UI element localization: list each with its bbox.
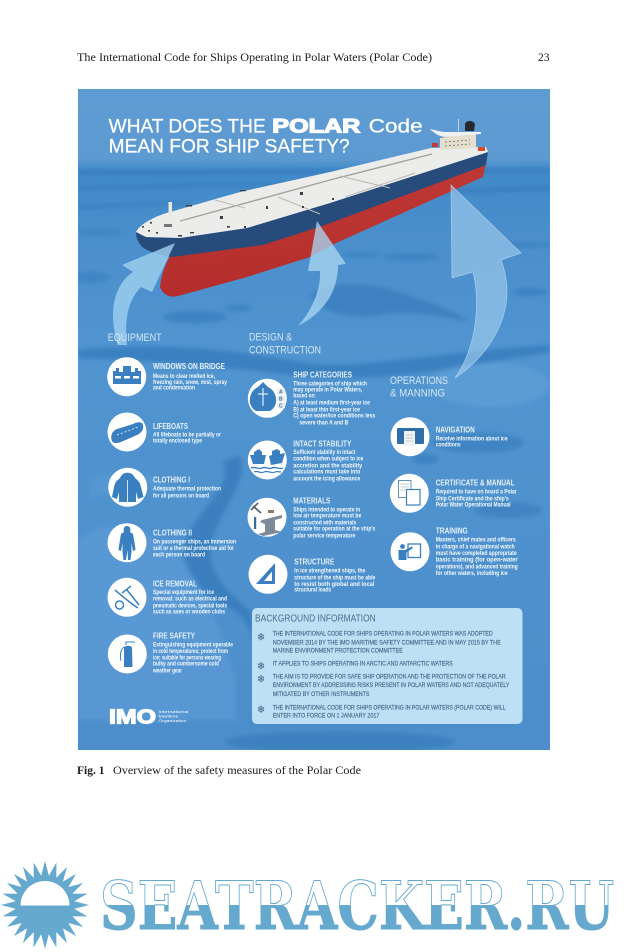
item: intact stability: accretion and the stability bbox=[293, 463, 363, 469]
background information bullets: ENVIRONMENT BY ADDRESSING RISKS PRESENT IN POLAR WATERS AND NOT ADEQUATELY bbox=[273, 683, 509, 689]
item: intact stability: condition when subject to ice bbox=[293, 457, 364, 463]
icon: jacket bbox=[108, 468, 147, 507]
item: training: for other waters, including ice bbox=[436, 571, 508, 577]
icon: documents bbox=[390, 474, 429, 513]
item: certificate and manual: Required to have on board a Polar bbox=[436, 490, 517, 496]
item: materials: constructed with materials bbox=[293, 521, 357, 527]
icon: steel beam and hammer bbox=[248, 498, 286, 537]
item: ship categories: based on: bbox=[293, 394, 316, 400]
icon: set square bbox=[248, 555, 288, 594]
item: ice removal: Special equipment for ice bbox=[153, 590, 215, 596]
item: ship categories: B) at least thin first-year ice bbox=[293, 407, 361, 413]
item: intact stability: INTACT STABILITY bbox=[293, 440, 352, 449]
icon: fire extinguisher bbox=[108, 634, 147, 674]
icon: lifeboat bbox=[108, 412, 146, 452]
item: windows on bridge: and condensation bbox=[153, 386, 195, 392]
item: ice removal: pneumatic devices, special tools bbox=[153, 603, 228, 609]
item: intact stability: Sufficient stability in intact bbox=[293, 450, 355, 456]
title bbox=[108, 118, 422, 153]
background information bullets: NOVEMBER 2014 BY THE IMO MARITIME SAFETY COMMITTEE AND IN MAY 2015 BY THE bbox=[273, 640, 501, 646]
item: clothing I: Adequate thermal protection bbox=[153, 487, 221, 493]
icon: ship with categories: A bbox=[279, 390, 283, 396]
item: materials: polar service temperature bbox=[293, 534, 356, 540]
item: fire safety: ice; suitable for persons wearing bbox=[153, 656, 221, 662]
item: lifeboats: totally enclosed type bbox=[153, 439, 203, 445]
title: WHAT DOES THE bbox=[109, 117, 266, 138]
icon: trainer at board bbox=[390, 532, 430, 571]
section heading: equipment: EQUIPMENT bbox=[108, 332, 162, 344]
item: clothing II bbox=[108, 523, 236, 562]
item: ship categories bbox=[248, 371, 376, 426]
poster background: sea ice bbox=[73, 89, 555, 753]
item: fire safety: Extinguishing equipment operable bbox=[153, 642, 234, 648]
item: structure: In ice strengthened ships, the bbox=[294, 569, 366, 575]
item: materials bbox=[248, 497, 376, 540]
icon: ship with categories: C bbox=[279, 404, 283, 410]
item: training: TRAINING bbox=[436, 527, 468, 536]
item: certificate and manual: Ship Certificate and the ship's bbox=[436, 496, 509, 502]
item: clothing I: for all persons on board bbox=[153, 494, 209, 500]
section heading: design and construction: DESIGN & bbox=[249, 332, 293, 344]
icon: ship with categories: B bbox=[279, 396, 283, 402]
item: ship categories: may operate in Polar Waters, bbox=[293, 388, 363, 394]
page running header: 23 bbox=[538, 52, 550, 64]
item: clothing II: each person on board bbox=[153, 553, 205, 559]
item: windows on bridge bbox=[107, 357, 228, 396]
item: materials: suitable for operation at the ship's bbox=[293, 527, 376, 533]
item: ship categories: A) at least medium first-year ice bbox=[293, 400, 371, 406]
panel: polar code poster bbox=[73, 89, 555, 753]
item: ship categories: SHIP CATEGORIES bbox=[293, 371, 353, 380]
icon: two ships on waves bbox=[248, 440, 287, 480]
item: windows on bridge: freezing rain, snow, mist, spray bbox=[153, 380, 228, 386]
ship superstructure bbox=[430, 119, 485, 151]
item: intact stability: calculations must take into bbox=[293, 470, 361, 476]
background information bullets: THE INTERNATIONAL CODE FOR SHIPS OPERATING IN POLAR WATERS WAS ADOPTED bbox=[273, 632, 493, 638]
background information bullets: IT APPLIES TO SHIPS OPERATING IN ARCTIC AND ANTARCTIC WATERS bbox=[273, 661, 453, 667]
page running header: The International Code for Ships Operating in Polar Waters (Polar Code) bbox=[77, 52, 432, 64]
icon: ship with categories bbox=[248, 379, 287, 418]
item: navigation: NAVIGATION bbox=[436, 426, 475, 435]
item: clothing II: CLOTHING II bbox=[153, 529, 192, 538]
item: clothing I: CLOTHING I bbox=[153, 476, 190, 485]
title: MEAN FOR SHIP SAFETY? bbox=[109, 137, 350, 158]
item: lifeboats: All lifeboats to be partially or bbox=[153, 433, 222, 439]
item: training: operations), and advanced training bbox=[436, 564, 518, 570]
arrow: operations and manning bbox=[451, 185, 521, 378]
background information bullets: ❄ bbox=[257, 674, 265, 686]
figure caption: Fig. 1 bbox=[77, 765, 105, 777]
IMO logo: International bbox=[158, 710, 189, 714]
background information bullets: MITIGATED BY OTHER INSTRUMENTS bbox=[273, 692, 369, 698]
item: certificate and manual bbox=[390, 474, 517, 513]
item: certificate and manual: CERTIFICATE & MANUAL bbox=[436, 478, 515, 487]
title: Code bbox=[369, 117, 423, 138]
IMO logo bbox=[110, 708, 188, 724]
item: clothing II: On passenger ships, an immersion bbox=[153, 539, 236, 545]
item: structure: to resist both global and local bbox=[294, 582, 375, 588]
item: certificate and manual: Polar Water Operational Manual bbox=[436, 503, 511, 509]
item: training: Masters, chief mates and officers bbox=[436, 538, 516, 544]
item: fire safety: in cold temperatures; protect from bbox=[153, 649, 228, 655]
item: fire safety: weather gear bbox=[152, 668, 183, 674]
icon: seatracker sun logo bbox=[1, 861, 89, 949]
figure caption: Overview of the safety measures of the Polar Code bbox=[113, 765, 361, 777]
section heading: operations and manning: & MANNING bbox=[390, 388, 445, 400]
item: lifeboats bbox=[108, 412, 222, 452]
section heading: operations and manning bbox=[390, 376, 448, 396]
background information heading: BACKGROUND INFORMATION bbox=[255, 614, 376, 625]
icon: ship bridge bbox=[107, 357, 146, 396]
arrow: equipment bbox=[113, 243, 175, 345]
icon: navigation display bbox=[390, 417, 430, 456]
item: ice removal: removal: such as electrical and bbox=[153, 597, 227, 603]
item: training bbox=[390, 527, 518, 577]
background information bullets: ❄ bbox=[257, 632, 265, 644]
section heading: operations and manning: OPERATIONS bbox=[390, 375, 448, 387]
item: clothing II: suit or a thermal protective aid for bbox=[153, 546, 235, 552]
item: materials: low air temperature must be bbox=[293, 513, 362, 519]
item: structure: STRUCTURE bbox=[294, 558, 335, 567]
panel: background information bbox=[252, 608, 522, 724]
item: training: in charge of a navigational watch bbox=[436, 544, 515, 550]
title: POLAR bbox=[272, 117, 361, 138]
item: fire safety bbox=[108, 631, 234, 674]
background information bullets bbox=[257, 632, 509, 720]
background information bullets: MARINE ENVIRONMENT PROTECTION COMMITTEE bbox=[273, 648, 403, 654]
item: intact stability bbox=[248, 440, 364, 483]
item: windows on bridge: WINDOWS ON BRIDGE bbox=[153, 362, 226, 371]
item: navigation: conditions bbox=[436, 443, 461, 449]
oil tanker illustration bbox=[136, 119, 488, 297]
IMO logo: Maritime bbox=[158, 714, 178, 718]
item: training: must have completed appropriate bbox=[436, 551, 517, 557]
item: structure: structural loads bbox=[294, 588, 332, 594]
item: ice removal: such as axes or wooden clubs bbox=[153, 610, 226, 616]
item: clothing I bbox=[108, 468, 221, 507]
background information bullets: THE INTERNATIONAL CODE FOR SHIPS OPERATING IN POLAR WATERS (POLAR CODE) WILL bbox=[273, 705, 506, 711]
icon: ice tools bbox=[108, 578, 146, 617]
item: windows on bridge: Means to clear melted ice, bbox=[153, 374, 215, 380]
item: ship categories: severe than A and B bbox=[299, 420, 349, 426]
item: navigation bbox=[390, 417, 508, 456]
IMO logo: Organization bbox=[158, 719, 186, 723]
background information bullets: THE AIM IS TO PROVIDE FOR SAFE SHIP OPERATION AND THE PROTECTION OF THE POLAR bbox=[273, 674, 506, 680]
item: structure: structure of the ship must be able bbox=[294, 575, 376, 581]
item: materials: Ships intended to operate in bbox=[293, 507, 361, 513]
item: fire safety: FIRE SAFETY bbox=[153, 631, 196, 640]
background information bullets: ❄ bbox=[257, 660, 265, 672]
arrow: design and construction bbox=[298, 221, 346, 326]
item: ship categories: C) open water/ice conditions less bbox=[293, 413, 376, 419]
item: structure bbox=[248, 555, 376, 594]
background information bullets: ENTER INTO FORCE ON 1 JANUARY 2017 bbox=[273, 714, 380, 720]
section heading: design and construction bbox=[249, 333, 320, 354]
item: ship categories: Three categories of ship which bbox=[293, 382, 367, 388]
item: navigation: Receive information about ice bbox=[436, 437, 508, 443]
item: fire safety: bulky and cumbersome cold bbox=[153, 662, 219, 668]
item: lifeboats: LIFEBOATS bbox=[153, 422, 189, 431]
item: training: basic training (for open-water bbox=[436, 558, 518, 564]
background information bullets: ❄ bbox=[257, 704, 265, 716]
item: materials: MATERIALS bbox=[293, 497, 331, 506]
item: intact stability: account the icing allowance bbox=[293, 477, 361, 483]
icon: immersion suit bbox=[108, 523, 146, 562]
section heading: design and construction: CONSTRUCTION bbox=[249, 344, 321, 356]
item: ice removal bbox=[108, 578, 228, 617]
item: ice removal: ICE REMOVAL bbox=[153, 580, 197, 589]
IMO logo: IMO bbox=[109, 706, 156, 728]
